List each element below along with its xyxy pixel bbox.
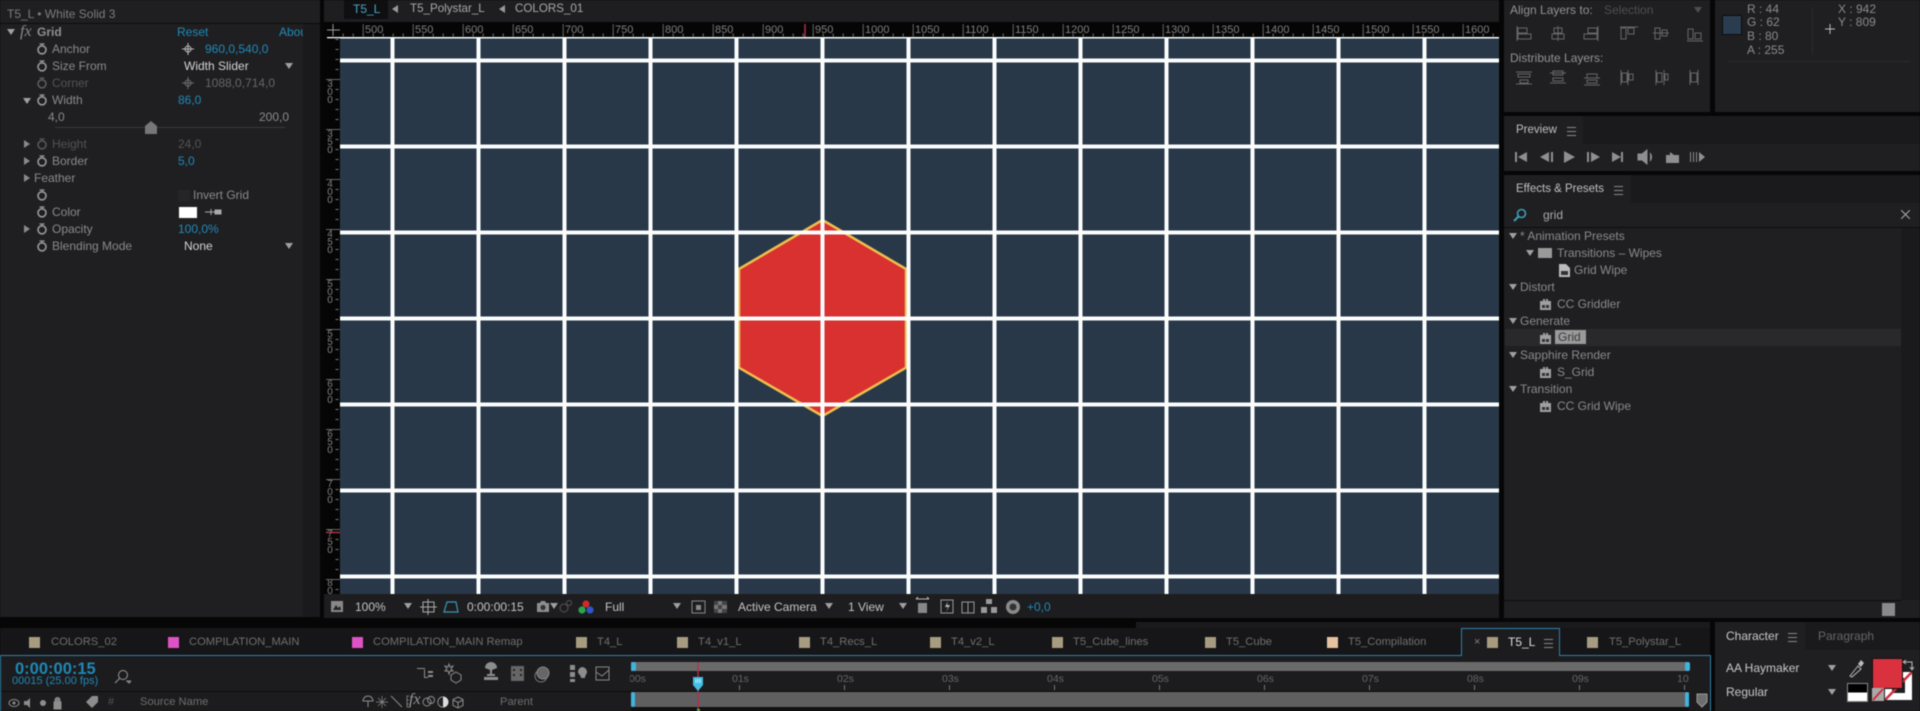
ruler label 350: 3 (327, 129, 333, 140)
font family: AA Haymaker (1726, 661, 1799, 675)
panel: preview (1504, 116, 1920, 171)
tab: T4_v1_L: T4_v1_L (698, 636, 742, 648)
ruler label 400 (327, 179, 333, 206)
ruler label 450: 4 (327, 229, 333, 240)
search field: grid (1543, 208, 1563, 222)
horizontal ruler: 1050 (915, 24, 939, 36)
time ruler: 05s (1152, 673, 1169, 685)
ruler label 550: 5 (327, 329, 333, 340)
tree: S_Grid (1539, 365, 1594, 380)
label column icon (85, 695, 99, 709)
camera: Active Camera (738, 600, 817, 614)
eyedropper (1848, 659, 1864, 678)
ruler label 550: 0 (327, 345, 333, 356)
RGBA values: G : 62 (1747, 15, 1780, 29)
property: Opacity: 100,0% (178, 222, 219, 236)
time ruler: 07s (1362, 673, 1379, 685)
panel: timeline tabs (0, 622, 1710, 656)
align icons (1516, 26, 1704, 42)
composition tab breadcrumb: COLORS_01 (515, 2, 583, 15)
active tab: T5_L: T5_L (1508, 635, 1535, 649)
swap arrows (1902, 659, 1915, 672)
new item icon (1882, 603, 1895, 616)
tree: Sapphire Render: Sapphire Render (1520, 348, 1611, 362)
ruler label 700 (327, 479, 333, 506)
tab: T5_Cube (1205, 635, 1275, 649)
tab: T4_v2_L: T4_v2_L (951, 636, 995, 648)
distribute icons (1516, 70, 1699, 86)
property: Height: Height (52, 137, 87, 151)
exposure: +0,0 (1027, 600, 1051, 614)
tab: COLORS_02 (29, 635, 119, 649)
ruler label 450 (327, 229, 333, 256)
horizontal ruler: 850 (715, 24, 733, 36)
property: Anchor: Anchor (52, 42, 90, 56)
width slider: 200,0 (259, 110, 289, 124)
character heading: Character (1726, 629, 1779, 643)
ruler label 400: 4 (327, 179, 333, 190)
property: Corner: 1088,0,714,0 (205, 76, 275, 90)
tab: T4_v2_L (930, 635, 1000, 649)
width slider (48, 110, 290, 134)
ruler label 750: 0 (327, 545, 333, 556)
effect header: Grid: fx (20, 23, 32, 40)
tab: T5_Compilation (1327, 635, 1442, 649)
tree: Transition (1504, 381, 1901, 398)
tab: T5_Cube: T5_Cube (1226, 636, 1272, 648)
ruler label 800 (327, 580, 333, 594)
ruler label 350: 0 (327, 145, 333, 156)
tab: T4_Recs_L (799, 635, 879, 649)
time ruler: 09s (1572, 673, 1589, 685)
font style: Regular (1726, 685, 1768, 699)
frame count: 00015 (25.00 fps) (12, 675, 98, 687)
horizontal ruler: 1300 (1165, 24, 1189, 36)
tab: T4_L: T4_L (597, 636, 622, 648)
work area bar (631, 662, 1689, 671)
ruler label 750 (327, 529, 333, 556)
time ruler: 04s (1047, 673, 1064, 685)
no colour swatch (1872, 688, 1884, 701)
source name column: Source Name (140, 696, 208, 708)
playhead (691, 662, 705, 711)
tab: T5_Polystar_L: T5_Polystar_L (1609, 636, 1681, 648)
ruler label 600: 0 (327, 387, 333, 398)
horizontal ruler: 1550 (1415, 24, 1439, 36)
ruler label 500 (327, 279, 333, 306)
panel: character (1715, 622, 1920, 711)
time ruler (630, 671, 1689, 691)
active tab: T5_L: × (1474, 636, 1480, 648)
horizontal ruler: 600 (465, 24, 483, 36)
panel: effect controls (0, 0, 320, 617)
ruler label 650: 0 (327, 445, 333, 456)
tab: T5_Polystar_L (1587, 635, 1692, 649)
horizontal ruler: 1600 (1465, 24, 1489, 36)
time ruler: 08s (1467, 673, 1484, 685)
width slider: 4,0 (48, 110, 65, 124)
stroke colour swatch (1885, 672, 1912, 700)
layer column icons (7, 695, 69, 711)
tree: Transition: Transition (1520, 382, 1572, 396)
property: Blending Mode: Blending Mode (52, 239, 132, 253)
align target: Selection (1604, 3, 1653, 17)
timecode: 0:00:00:15 (467, 600, 524, 614)
horizontal ruler: 550 (415, 24, 433, 36)
property: Corner: Corner (52, 76, 89, 90)
tab: T4_v1_L (677, 635, 747, 649)
property: Opacity (23, 222, 219, 236)
search icon (114, 669, 131, 685)
RGBA values: B : 80 (1747, 29, 1778, 43)
ruler label 500: 0 (327, 295, 333, 306)
ruler label 350: 5 (327, 137, 333, 148)
ruler label 450: 0 (327, 245, 333, 256)
property: Border: Border (52, 154, 88, 168)
property: Opacity: Opacity (52, 222, 93, 236)
horizontal ruler: 1000 (865, 24, 889, 36)
horizontal ruler (324, 22, 1499, 37)
parent column: Parent (500, 696, 533, 708)
property: Invert Grid: Invert Grid (193, 188, 249, 202)
effects heading: Effects & Presets (1516, 183, 1604, 195)
horizontal ruler: 500 (365, 24, 383, 36)
composition tab breadcrumb: T5_L (353, 2, 380, 16)
ruler label 300 (327, 79, 333, 106)
tab: COMPILATION_MAIN: COMPILATION_MAIN (189, 636, 299, 648)
horizontal ruler: 1400 (1265, 24, 1289, 36)
ruler label 700: 0 (327, 495, 333, 506)
property: Size From (36, 59, 294, 73)
ruler label 600: 0 (327, 395, 333, 406)
ruler label 300: 3 (327, 79, 333, 90)
timeline switches (411, 662, 616, 686)
ruler label 550: 5 (327, 337, 333, 348)
preview heading: Preview (1516, 124, 1557, 136)
default colours (1847, 683, 1868, 702)
effects tree (1508, 229, 1662, 413)
effect header: Grid (6, 23, 304, 40)
distribute heading: Distribute Layers: (1510, 51, 1603, 65)
zoom level: 100% (355, 600, 386, 614)
property: Corner (36, 76, 275, 90)
current time: 0:00:00:15 (15, 660, 96, 678)
time ruler: 01s (732, 673, 749, 685)
RGBA values: R : 44 (1747, 2, 1779, 16)
playback controls (1514, 148, 1706, 166)
tree: Grid selected (1539, 329, 1587, 345)
tree: Transitions - Wipes: Transitions – Wipes (1557, 246, 1662, 260)
hexagon (739, 220, 906, 416)
horizontal ruler: 700 (565, 24, 583, 36)
property: Anchor: 960,0,540,0 (205, 42, 268, 56)
align heading: Align Layers to: (1510, 3, 1593, 17)
tab: T5_Compilation: T5_Compilation (1348, 636, 1426, 648)
ruler label 350 (327, 129, 333, 156)
property: Size From: Width Slider (184, 59, 249, 73)
panel: effects and presets (1504, 175, 1920, 618)
RGBA values: A : 255 (1747, 43, 1784, 57)
horizontal ruler: 1350 (1215, 24, 1239, 36)
property: Width (22, 93, 202, 107)
property: Invert Grid (36, 188, 249, 202)
effect header: Grid: Reset (177, 25, 208, 39)
tab: T5_Cube_lines: T5_Cube_lines (1073, 636, 1148, 648)
horizontal ruler: 1100 (965, 24, 989, 36)
composition marker (1696, 693, 1708, 708)
work area end handle (1685, 662, 1690, 671)
property: Size From: Size From (52, 59, 107, 73)
property: Anchor (36, 42, 269, 56)
layer start handle (631, 692, 635, 707)
layer end handle (1685, 692, 1689, 707)
ruler label 750: 5 (327, 537, 333, 548)
active tab: T5_L (1461, 628, 1560, 656)
view layout: 1 View (848, 600, 884, 614)
ruler label 300: 0 (327, 95, 333, 106)
property: Feather: Feather (34, 171, 75, 185)
viewer toolbar (324, 594, 1499, 618)
ruler label 650: 5 (327, 437, 333, 448)
panel title: T5_L • White Solid 3 (7, 7, 115, 21)
horizontal ruler: 1500 (1365, 24, 1389, 36)
property: Color (36, 205, 222, 219)
ruler label 700: 0 (327, 487, 333, 498)
property: Width: Width (52, 93, 83, 107)
fill colour swatch (1872, 658, 1903, 689)
work area handles (631, 662, 636, 671)
ruler label 400: 0 (327, 195, 333, 206)
property: Height (23, 137, 202, 151)
tab: T4_Recs_L: T4_Recs_L (820, 636, 877, 648)
ruler label 300: 0 (327, 87, 333, 98)
time ruler: 02s (837, 673, 854, 685)
tab: T4_L (576, 635, 626, 649)
horizontal ruler: 1150 (1015, 24, 1039, 36)
panel: info (1715, 0, 1920, 112)
layer switch icons (361, 695, 481, 710)
search field (1504, 203, 1920, 228)
tree: Grid selected: Grid (1558, 330, 1581, 344)
panel: align (1504, 0, 1710, 112)
tree: CC Grid Wipe: CC Grid Wipe (1557, 399, 1631, 413)
ruler label 700: 7 (327, 479, 333, 490)
ruler label 400: 0 (327, 187, 333, 198)
ruler label 750: 7 (327, 529, 333, 540)
property: Color: Color (52, 205, 81, 219)
property: Border: 5,0 (178, 154, 195, 168)
horizontal ruler: 650 (515, 24, 533, 36)
horizontal ruler: 1250 (1115, 24, 1139, 36)
property: Width: 86,0 (178, 93, 201, 107)
ruler label 650 (327, 429, 333, 456)
tree: Animation Presets: * Animation Presets (1520, 229, 1625, 243)
tree: CC Griddler: CC Griddler (1557, 297, 1620, 311)
layer duration bar (631, 692, 1689, 707)
tree: CC Grid Wipe (1504, 398, 1901, 415)
cursor coordinates: X : 942 (1838, 2, 1876, 16)
tree: Distort: Distort (1520, 280, 1555, 294)
selected row highlight (1505, 329, 1901, 346)
time ruler: 06s (1257, 673, 1274, 685)
tree: S_Grid: S_Grid (1557, 365, 1594, 379)
composition tab breadcrumb (324, 0, 1499, 22)
property: Blending Mode (36, 239, 294, 253)
effect header: Grid: Grid (37, 25, 62, 39)
horizontal ruler: 800 (665, 24, 683, 36)
vertical ruler (324, 37, 340, 594)
tab: T5_Cube_lines (1052, 635, 1157, 649)
horizontal ruler: 1200 (1065, 24, 1089, 36)
paragraph tab: Paragraph (1818, 629, 1874, 643)
cursor coordinates (1824, 2, 1876, 34)
ruler label 500: 5 (327, 279, 333, 290)
tab: COLORS_02: COLORS_02 (51, 636, 117, 648)
horizontal ruler: 750 (615, 24, 633, 36)
property: Blending Mode: None (184, 239, 213, 253)
ruler label 600: 6 (327, 379, 333, 390)
cursor coordinates: Y : 809 (1838, 15, 1876, 29)
horizontal ruler: 900 (765, 24, 783, 36)
horizontal ruler: 1450 (1315, 24, 1339, 36)
ruler label 650: 6 (327, 429, 333, 440)
composition viewer: grid and hexagon (339, 36, 1500, 595)
tree: Generate: Generate (1520, 314, 1570, 328)
tab: COMPILATION_MAIN Remap: COMPILATION_MAIN Remap (373, 636, 523, 648)
RGBA values (1746, 2, 1784, 57)
sampled colour swatch (1722, 15, 1742, 35)
property: Border (23, 154, 195, 168)
resolution: Full (605, 600, 624, 614)
ruler label 450: 5 (327, 237, 333, 248)
horizontal ruler: 950 (815, 24, 833, 36)
ruler label 600 (327, 379, 333, 406)
composition tab breadcrumb: T5_Polystar_L (410, 2, 485, 15)
ruler label 500: 0 (327, 287, 333, 298)
property: Height: 24,0 (178, 137, 201, 151)
time ruler: 03s (942, 673, 959, 685)
panel: timeline (0, 655, 1711, 711)
tree: Grid Wipe: Grid Wipe (1574, 263, 1627, 277)
fx switch: fx (409, 691, 421, 708)
hash column: # (108, 696, 114, 708)
ruler label 550 (327, 329, 333, 356)
